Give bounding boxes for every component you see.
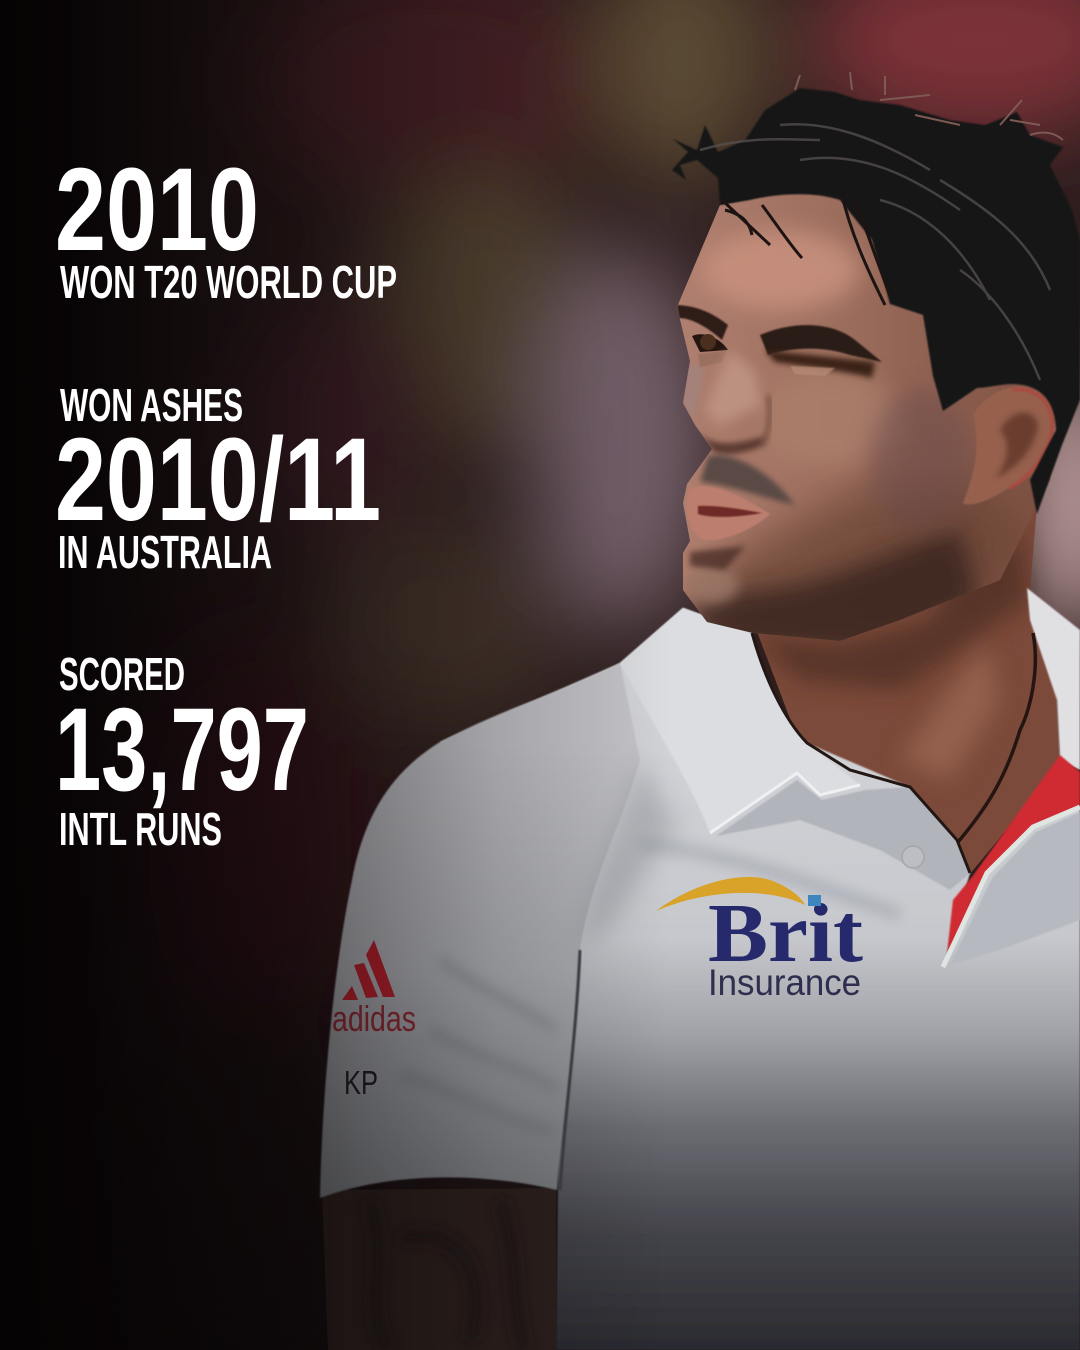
face and head (677, 193, 1050, 641)
hair highlights (700, 124, 1050, 380)
runs number: 13,797 (55, 684, 309, 816)
sleeve wrinkles (400, 960, 558, 1130)
cheek light (780, 374, 893, 466)
hair strands on forehead (722, 195, 890, 305)
ear inner (995, 412, 1038, 478)
left collar (620, 608, 860, 833)
stat block: international runs (55, 648, 309, 855)
under collar shadow (716, 780, 970, 890)
under lip shadow (690, 546, 745, 570)
iris (700, 334, 716, 350)
Brit logo: Brit (708, 887, 863, 980)
neck (745, 500, 1060, 880)
moustache (700, 455, 795, 505)
right chest panel (950, 812, 1080, 965)
year 2010/11: 2010/11 (55, 414, 381, 546)
neck shadow under chin (750, 530, 1030, 690)
skin base (677, 193, 1050, 641)
KP initials: KP (344, 1064, 378, 1101)
adidas wordmark: adidas (332, 998, 416, 1039)
right collar (1027, 588, 1080, 770)
Insurance logo: Insurance (708, 962, 861, 1003)
nose underside (697, 430, 765, 454)
left eye (692, 334, 728, 352)
jaw stubble (690, 530, 980, 660)
mouth opening (698, 506, 762, 517)
collar edge line (710, 773, 860, 833)
caption: WON T20 WORLD CUP (60, 256, 397, 308)
Brit swoosh (656, 877, 805, 911)
heading: WON ASHES (60, 379, 243, 431)
lower lid (698, 351, 726, 367)
hair (672, 88, 1080, 514)
caption: INTL RUNS (59, 803, 222, 855)
button (902, 846, 924, 868)
placket white trim (943, 807, 1080, 967)
stray hairs (795, 72, 1063, 140)
sleeve (320, 663, 640, 1198)
lower cheek shade (720, 480, 1040, 650)
tattooed forearm (322, 1188, 556, 1350)
Brit i dot (808, 895, 821, 906)
sleeve seam (560, 950, 580, 1190)
necklace (958, 633, 1035, 842)
chin (686, 567, 738, 603)
nose bridge light (705, 350, 762, 425)
adidas stripes (342, 940, 395, 1000)
stat block: Ashes (55, 379, 381, 578)
shirt body (440, 608, 1080, 1350)
face side light (685, 366, 703, 413)
neck collar outline (752, 633, 970, 873)
nose side crease (762, 395, 770, 446)
right brow (760, 325, 882, 362)
ear rim (1010, 389, 1053, 488)
heading: SCORED (59, 648, 185, 700)
right eye socket (765, 350, 875, 378)
sleeve shadow at edge (580, 760, 680, 950)
side cheek shade (864, 389, 968, 504)
chest shadow wrinkle (640, 845, 900, 915)
stat block: T20 World Cup (55, 144, 397, 308)
red placket (947, 755, 1080, 953)
year 2010: 2010 (55, 144, 259, 276)
lips (687, 486, 770, 540)
tattoo shapes (370, 1200, 525, 1350)
player photo illustration (320, 72, 1080, 1350)
neck highlight (900, 640, 1000, 780)
forehead light (700, 230, 860, 310)
caption: IN AUSTRALIA (58, 526, 272, 578)
lower lid highlight (790, 366, 835, 376)
left brow (677, 305, 728, 340)
ear (963, 387, 1055, 505)
